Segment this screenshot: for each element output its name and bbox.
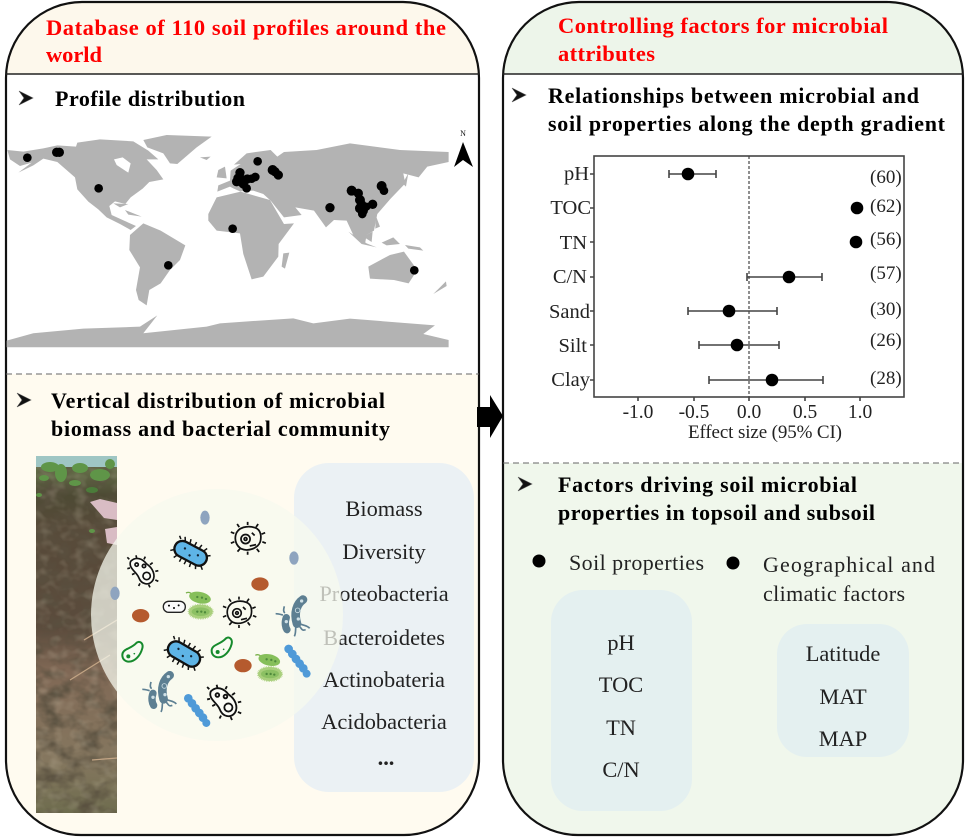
box: geographical and climatic list: MAP bbox=[819, 726, 867, 751]
list box: microbial attributes: Biomass bbox=[345, 496, 423, 521]
world map bbox=[7, 135, 449, 347]
chart: effect size forest plot: (57) bbox=[870, 263, 902, 284]
list box: microbial attributes bbox=[294, 463, 474, 792]
list box: microbial attributes: Proteobacteria bbox=[319, 581, 449, 606]
panel: database (left) bbox=[6, 2, 479, 835]
title: database of soil profiles bbox=[46, 15, 446, 67]
chart: effect size forest plot: -0.5 bbox=[679, 402, 709, 423]
icon: north arrow bbox=[454, 129, 473, 167]
chart: effect size forest plot: (30) bbox=[870, 299, 902, 320]
photo: soil profile bbox=[36, 456, 117, 813]
panel: controlling factors (right) bbox=[503, 2, 963, 835]
box: soil property list: C/N bbox=[602, 757, 640, 782]
chart: effect size forest plot: (62) bbox=[870, 196, 902, 217]
list box: microbial attributes: Diversity bbox=[342, 539, 426, 564]
legend: geographical and climatic factors: climatic factors bbox=[763, 581, 905, 606]
icon: blue rod bacteria bbox=[161, 533, 213, 674]
heading: relationships: soil properties along the depth gradient bbox=[548, 111, 946, 136]
title: database of soil profiles: world bbox=[46, 42, 102, 67]
box: geographical and climatic list: Latitude bbox=[806, 641, 880, 666]
icon: blue chain bacteria bbox=[184, 645, 311, 727]
chart: effect size forest plot: (60) bbox=[870, 167, 902, 188]
box: soil property list bbox=[551, 590, 692, 811]
title: controlling factors: Controlling factors for microbial bbox=[558, 13, 888, 38]
box: geographical and climatic list: MAT bbox=[819, 684, 867, 709]
box: soil property list: TOC bbox=[599, 672, 643, 697]
chart: effect size forest plot: -1.0 bbox=[623, 402, 653, 423]
chart: effect size forest plot: Clay bbox=[551, 369, 591, 391]
heading: factors driving: Factors driving soil microbial bbox=[558, 472, 857, 497]
chart: effect size forest plot: Effect size (95% CI) bbox=[688, 422, 842, 443]
list box: microbial attributes: Bacteroidetes bbox=[323, 625, 445, 650]
heading: vertical distribution: biomass and bacterial community bbox=[51, 416, 390, 441]
icon: oval cells bbox=[110, 511, 299, 672]
heading: profile distribution: Profile distribution bbox=[55, 86, 245, 111]
heading: factors driving: properties in topsoil and subsoil bbox=[558, 500, 875, 525]
microbes illustration bbox=[110, 511, 311, 727]
heading: factors driving bbox=[518, 472, 875, 525]
title: controlling factors bbox=[558, 13, 888, 66]
list box: microbial attributes: Acidobacteria bbox=[321, 709, 447, 734]
chart: effect size forest plot: Silt bbox=[558, 335, 587, 357]
list box: microbial attributes: ... bbox=[378, 745, 394, 770]
icon: green paired bacteria bbox=[186, 590, 282, 681]
chart: effect size forest plot: pH bbox=[564, 163, 589, 185]
box: geographical and climatic list bbox=[777, 624, 909, 757]
magnified microbe circle bbox=[91, 489, 343, 741]
legend: geographical and climatic factors bbox=[726, 552, 935, 606]
icon: grey-blue worm bacteria bbox=[142, 599, 310, 712]
chart: effect size forest plot: TN bbox=[560, 232, 587, 254]
chart: effect size forest plot: TOC bbox=[550, 197, 591, 219]
icon: small pill bacterium bbox=[163, 601, 185, 612]
box: soil property list: pH bbox=[607, 630, 635, 655]
title: controlling factors: attributes bbox=[558, 41, 655, 66]
chart: effect size forest plot: 0.0 bbox=[737, 402, 761, 423]
icon: spiky round microbes bbox=[223, 522, 266, 628]
legend: soil properties: Soil properties bbox=[569, 550, 704, 575]
chart: effect size forest plot: Sand bbox=[549, 301, 590, 323]
chart: effect size forest plot: (26) bbox=[870, 330, 902, 351]
chart: effect size forest plot: 1.0 bbox=[848, 402, 872, 423]
icon: green comma bacteria bbox=[122, 638, 232, 662]
icon: outlined amoeba bacteria bbox=[127, 555, 241, 720]
title: database of soil profiles: Database of 110 soil profiles around the bbox=[46, 15, 446, 40]
heading: vertical distribution: Vertical distribution of microbial bbox=[51, 388, 385, 413]
heading: relationships bbox=[512, 83, 946, 136]
icon: north arrow: N bbox=[460, 129, 466, 138]
heading: vertical distribution bbox=[17, 388, 390, 441]
heading: relationships: Relationships between microbial and bbox=[548, 83, 919, 108]
box: soil property list: TN bbox=[606, 715, 636, 740]
legend: geographical and climatic factors: Geographical and bbox=[763, 552, 935, 577]
chart: effect size forest plot: (28) bbox=[870, 368, 902, 389]
arrow: left to right bbox=[477, 395, 503, 438]
list box: microbial attributes: Actinobateria bbox=[323, 667, 445, 692]
chart: effect size forest plot: (56) bbox=[870, 229, 902, 250]
chart: effect size forest plot: C/N bbox=[553, 266, 587, 288]
chart: effect size forest plot: 0.5 bbox=[793, 402, 817, 423]
chart: effect size forest plot bbox=[549, 156, 904, 443]
